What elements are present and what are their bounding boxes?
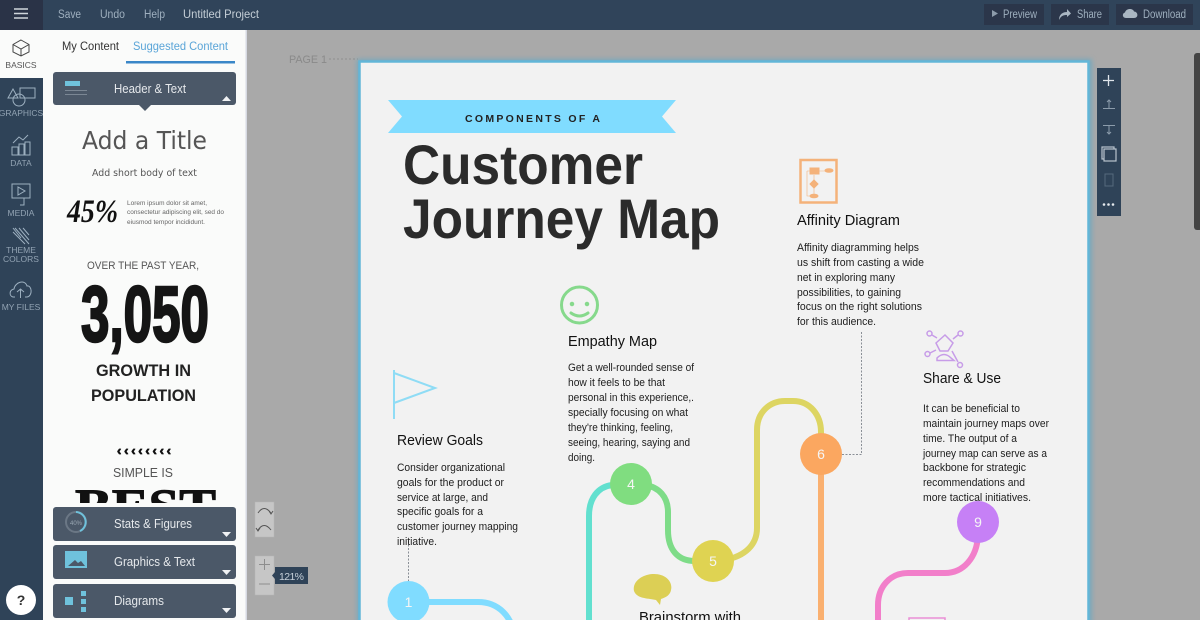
redo and undo buttons bbox=[255, 502, 274, 537]
icon: affinity diagram bbox=[800, 160, 836, 202]
media tab bbox=[8, 184, 35, 218]
segment 1 bbox=[408, 602, 515, 620]
sample stat bbox=[66, 194, 224, 230]
step 9: 9 bbox=[974, 514, 982, 530]
step text: share and use: backbone for strategic bbox=[923, 462, 1027, 474]
segment 5 to 6 bbox=[725, 401, 821, 560]
scrollbar bbox=[1194, 53, 1200, 230]
step text: review goals: service at large, and bbox=[397, 492, 488, 504]
graphics tab: GRAPHICS bbox=[0, 108, 44, 118]
basics tab: BASICS bbox=[5, 60, 37, 70]
header and text bar: Header & Text bbox=[114, 82, 186, 96]
step text: share and use: recommendations and bbox=[923, 477, 1025, 489]
page label bbox=[289, 54, 358, 66]
menu items bbox=[58, 7, 260, 21]
more bbox=[1103, 203, 1114, 206]
title bbox=[403, 133, 720, 250]
step text: empathy map: Get a well-rounded sense of bbox=[568, 362, 694, 374]
step text: share and use: It can be beneficial to bbox=[923, 403, 1020, 415]
step text: review goals: customer journey mapping bbox=[397, 521, 518, 533]
sample stat: eiusmod tempor incididunt. bbox=[127, 219, 205, 226]
step text: empathy map: personal in this experience,. bbox=[568, 392, 694, 404]
delete bbox=[1105, 174, 1113, 186]
tabs: My Content bbox=[62, 39, 120, 53]
sample simple is best bbox=[75, 448, 216, 503]
document page bbox=[360, 62, 1088, 620]
sample stat: consectetur adipiscing elit, sed do bbox=[127, 209, 224, 216]
step text: empathy map: doing. bbox=[568, 452, 595, 464]
help button bbox=[6, 585, 36, 615]
page label: PAGE 1 bbox=[289, 54, 327, 66]
download button: Download bbox=[1143, 9, 1186, 21]
step text: share and use: journey map can serve as a bbox=[922, 448, 1047, 460]
icon: flag bbox=[394, 370, 435, 419]
help button: ? bbox=[17, 592, 25, 608]
sample simple is best: SIMPLE IS bbox=[113, 466, 173, 480]
segment 8 to 9 bbox=[878, 535, 978, 620]
step 1 bbox=[388, 581, 430, 620]
segment 4 to 5 bbox=[645, 485, 695, 561]
hamburger menu bbox=[0, 0, 43, 30]
tabs bbox=[62, 39, 235, 64]
my files tab bbox=[2, 282, 41, 312]
graphics tab bbox=[0, 88, 44, 118]
download button bbox=[1116, 4, 1193, 25]
sample growth stat: OVER THE PAST YEAR, bbox=[87, 260, 199, 272]
move up bbox=[1103, 100, 1115, 108]
zoom and undo controls bbox=[255, 502, 308, 595]
step 6: 6 bbox=[817, 446, 825, 462]
tabs: Suggested Content bbox=[133, 39, 229, 53]
step text: affinity diagram: us shift from casting a wide bbox=[797, 257, 924, 269]
step text: affinity diagram: Affinity Diagram bbox=[797, 212, 900, 229]
step text: share and use: more tactical initiatives. bbox=[923, 492, 1031, 504]
step text: share and use: time. The output of a bbox=[923, 433, 1017, 445]
step text: review goals: goals for the product or bbox=[397, 477, 504, 489]
theme colors tab: THEME bbox=[6, 245, 36, 255]
menu items: Help bbox=[144, 9, 165, 21]
graphics and text bar: Graphics & Text bbox=[114, 555, 195, 569]
icon: pink card bbox=[909, 618, 945, 620]
step text: review goals: specific goals for a bbox=[397, 506, 483, 518]
sample stat: Lorem ipsum dolor sit amet, bbox=[127, 200, 207, 207]
menu items: Untitled Project bbox=[183, 7, 260, 21]
sample simple is best: BEST bbox=[75, 478, 216, 534]
step text: review goals: Review Goals bbox=[397, 432, 483, 449]
stats and figures bar: Stats & Figures bbox=[114, 517, 192, 531]
step text: empathy map: specially focusing on what bbox=[568, 407, 688, 419]
step text: affinity diagram: net in exploring many bbox=[797, 272, 896, 284]
move down bbox=[1103, 126, 1115, 134]
step 4: 4 bbox=[627, 476, 635, 492]
step text: review goals: Consider organizational bbox=[397, 462, 505, 474]
step 9 bbox=[957, 501, 999, 543]
segment 6 to 7 bbox=[818, 470, 824, 620]
segment 3 to 4 bbox=[589, 485, 612, 620]
share button: Share bbox=[1077, 9, 1102, 21]
sample growth stat bbox=[81, 260, 209, 405]
step 6 bbox=[800, 433, 842, 475]
zoom buttons bbox=[255, 556, 274, 595]
step text: affinity diagram bbox=[797, 212, 924, 328]
add page bbox=[1103, 75, 1114, 86]
sample simple is best: ‹‹‹‹‹‹‹‹ bbox=[117, 443, 171, 458]
step text: share and use: maintain journey maps over bbox=[923, 418, 1049, 430]
menu items: Undo bbox=[100, 9, 125, 21]
page toolbar bbox=[1097, 68, 1121, 216]
icon: brain bbox=[634, 574, 671, 605]
left content panel bbox=[43, 30, 247, 620]
step text: affinity diagram: for this audience. bbox=[797, 316, 876, 328]
stats and figures bar: 40% bbox=[70, 521, 83, 527]
connector dashes bbox=[408, 332, 862, 582]
document glow bbox=[357, 59, 1092, 620]
menu items: Save bbox=[58, 9, 81, 21]
step text: empathy map bbox=[568, 333, 694, 464]
stats and figures bar bbox=[53, 507, 236, 541]
top bar bbox=[0, 0, 1200, 30]
data tab bbox=[10, 135, 32, 168]
step markers bbox=[388, 433, 999, 620]
step text: review goals bbox=[397, 432, 518, 548]
diagrams bar: Diagrams bbox=[114, 594, 164, 608]
sample growth stat: POPULATION bbox=[91, 386, 196, 405]
theme colors tab bbox=[3, 228, 39, 264]
zoom level: 121% bbox=[279, 571, 304, 583]
my files tab: MY FILES bbox=[2, 302, 41, 312]
data tab: DATA bbox=[10, 158, 32, 168]
step text: share and use bbox=[922, 370, 1049, 504]
left icon rail bbox=[0, 30, 44, 620]
duplicate bbox=[1102, 147, 1116, 161]
icon: smiley bbox=[562, 287, 598, 323]
share button bbox=[1051, 4, 1109, 25]
step text: affinity diagram: focus on the right solutions bbox=[797, 301, 922, 313]
step 1: 1 bbox=[405, 594, 413, 610]
preview button bbox=[984, 4, 1044, 25]
title: Journey Map bbox=[403, 187, 720, 250]
banner: COMPONENTS OF A bbox=[465, 113, 600, 125]
step text: empathy map: Empathy Map bbox=[568, 333, 657, 350]
banner bbox=[388, 100, 676, 133]
sample growth stat: 3,050 bbox=[81, 269, 209, 358]
diagrams bar bbox=[53, 584, 236, 618]
step text: empathy map: they're thinking, feeling, bbox=[568, 422, 673, 434]
step 5: 5 bbox=[709, 553, 717, 569]
journey path bbox=[408, 401, 978, 620]
step text: empathy map: seeing, hearing, saying and bbox=[568, 437, 690, 449]
step text: affinity diagram: Affinity diagramming helps bbox=[797, 242, 919, 254]
theme colors tab: COLORS bbox=[3, 254, 39, 264]
basics tab bbox=[0, 30, 43, 78]
step text: review goals: initiative. bbox=[397, 536, 437, 548]
icon: share network bbox=[925, 331, 963, 368]
step 5 bbox=[692, 540, 734, 582]
sample title: Add a Title bbox=[82, 126, 207, 155]
preview button: Preview bbox=[1003, 9, 1038, 21]
step text: share and use: Share & Use bbox=[923, 370, 1001, 387]
sample body: Add short body of text bbox=[92, 168, 197, 179]
step 4 bbox=[610, 463, 652, 505]
canvas background bbox=[246, 30, 1200, 620]
sample growth stat: GROWTH IN bbox=[96, 361, 191, 380]
media tab: MEDIA bbox=[8, 208, 35, 218]
header and text bar bbox=[53, 72, 236, 111]
step text: empathy map: how it feels to be that bbox=[568, 377, 665, 389]
step text: affinity diagram: possibilities, to gaining bbox=[797, 287, 901, 299]
sample stat: 45% bbox=[66, 194, 118, 230]
title: Customer bbox=[403, 133, 643, 196]
graphics and text bar bbox=[53, 545, 236, 579]
